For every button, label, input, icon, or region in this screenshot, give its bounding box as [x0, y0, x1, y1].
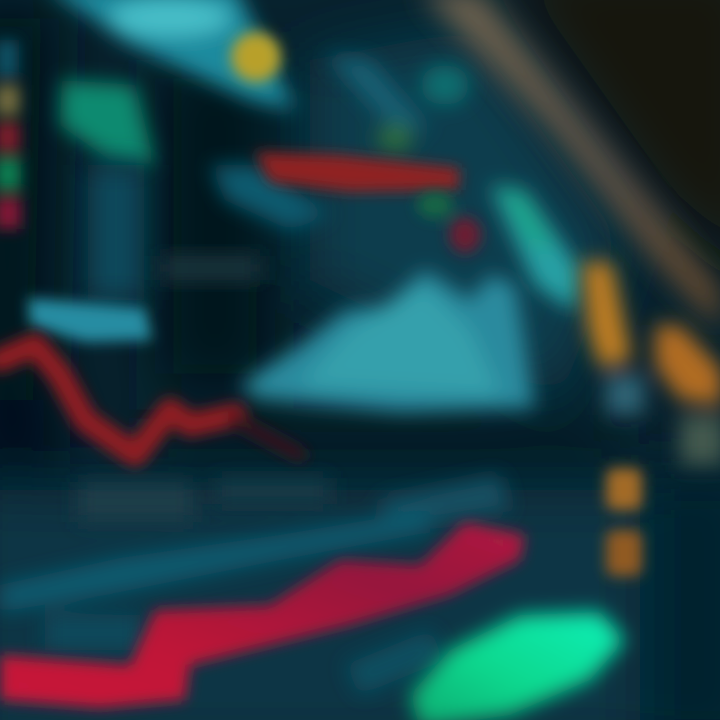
top cyan panel [45, 0, 295, 110]
red line chart [0, 345, 300, 455]
orange bars [582, 262, 720, 465]
vertical teal bar [88, 165, 144, 300]
upper teal shapes [210, 55, 469, 230]
orange marks lower [606, 468, 642, 576]
diagonal teal-green bar [490, 185, 580, 312]
left column tickers [0, 40, 21, 229]
red bar [255, 152, 460, 192]
cyan mountain chart [240, 270, 535, 412]
crimson area chart [0, 522, 525, 708]
diagonal tan streak [420, 0, 720, 330]
cyan label bar [28, 298, 152, 342]
muted bands [0, 475, 510, 695]
green block [60, 80, 155, 165]
small green and red marks [417, 192, 481, 253]
bright green blob [410, 612, 625, 720]
yellow dot [231, 32, 281, 82]
grey line [160, 256, 260, 280]
